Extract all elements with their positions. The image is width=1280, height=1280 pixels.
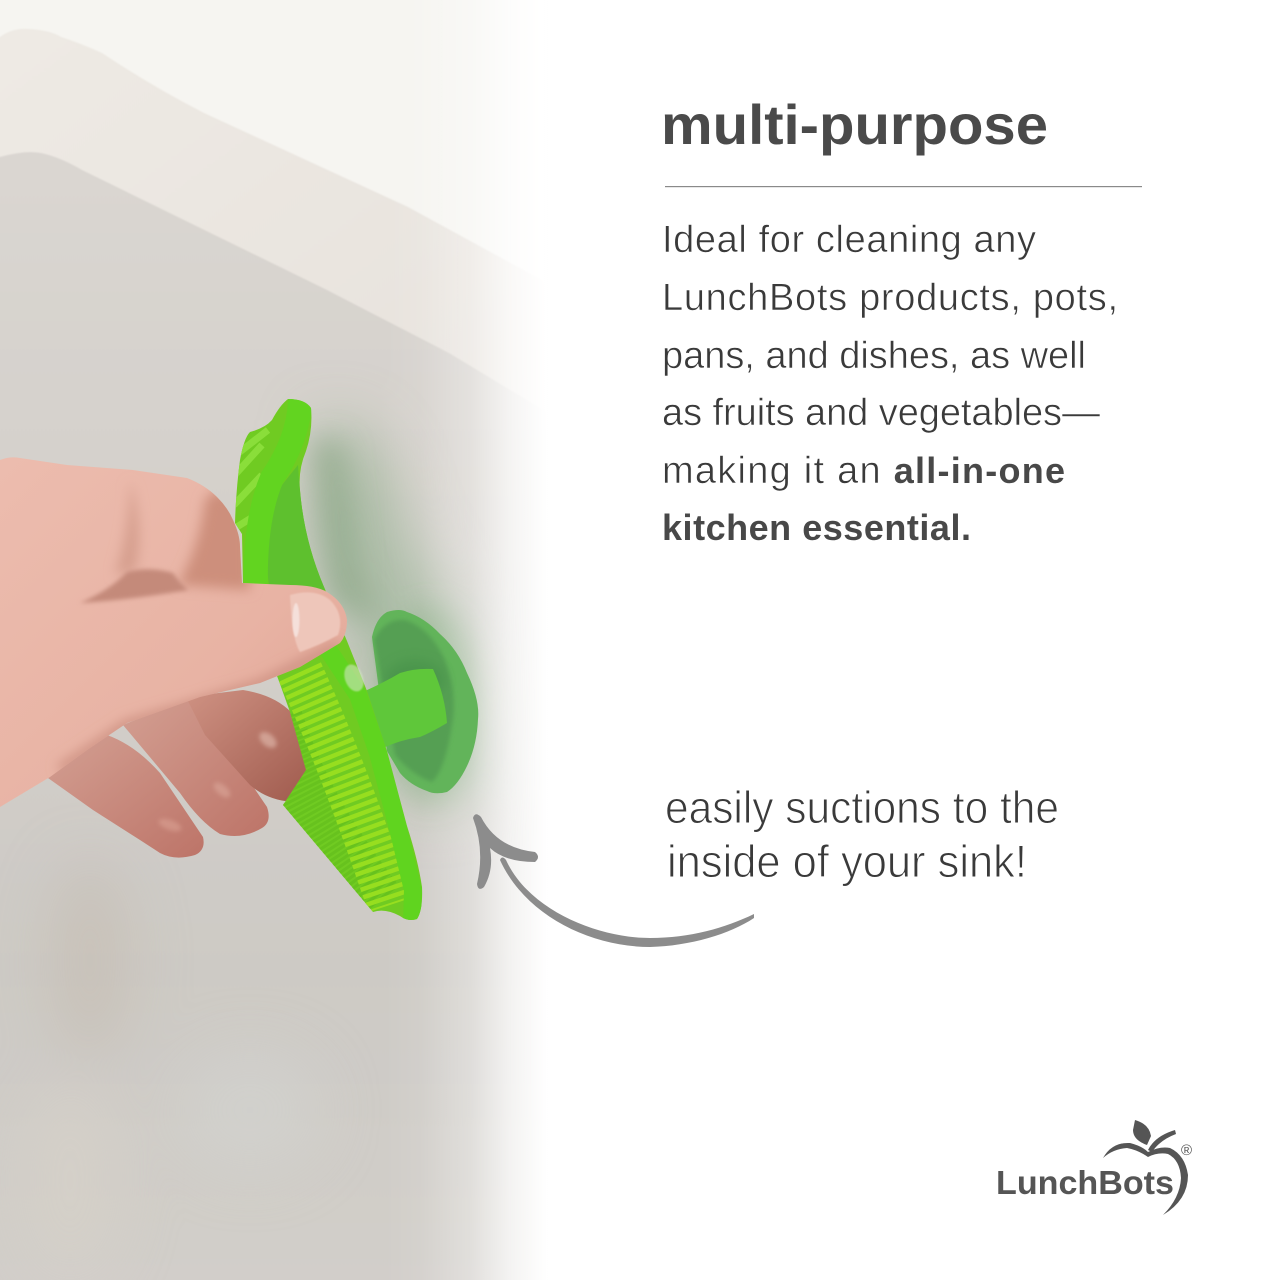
logo: LunchBots — [996, 1120, 1192, 1215]
body text: LunchBots products, pots, — [662, 277, 1118, 319]
body text: pans, and dishes, as well — [662, 335, 1086, 377]
wall behind the sink — [0, 0, 560, 420]
photo: hand fingers behind brush — [48, 690, 312, 858]
divider rule — [665, 186, 1142, 187]
sink stains — [20, 860, 320, 1280]
sink rim — [0, 29, 560, 460]
arrow: curved pointer to suction cup — [473, 814, 754, 947]
body text — [662, 219, 1118, 548]
registered mark: ® — [1181, 1142, 1192, 1159]
photo: hand and thumb — [0, 457, 347, 807]
thumb fold — [80, 569, 188, 603]
body text: kitchen essential. — [662, 507, 971, 548]
handwritten callout — [665, 782, 1059, 887]
logo wordmark: LunchBots — [996, 1164, 1174, 1201]
green reflection on basin — [310, 420, 490, 810]
bristle comb — [300, 672, 390, 905]
scrubber raised edge — [256, 402, 300, 592]
cup dark ring — [385, 660, 445, 700]
thumb underside shade — [60, 645, 340, 770]
body text: as fruits and vegetables— — [662, 392, 1100, 434]
logo apple — [1103, 1143, 1188, 1215]
handwritten callout: inside of your sink! — [667, 836, 1027, 887]
palm and thumb — [0, 457, 347, 807]
index finger — [186, 690, 312, 801]
index knuckle shade — [178, 490, 250, 590]
cup inner shade — [374, 620, 454, 782]
thumbnail — [290, 592, 340, 652]
body text: Ideal for cleaning any — [662, 219, 1036, 261]
stem — [365, 669, 447, 748]
finger highlights — [157, 729, 280, 834]
middle finger — [123, 698, 269, 836]
photo: suction cup and stem — [365, 610, 478, 793]
inner bristles — [272, 720, 375, 905]
ring finger — [48, 735, 204, 858]
edge strip — [325, 645, 413, 925]
water droplets — [341, 662, 367, 694]
photo: green silicone scrubber — [232, 399, 422, 925]
body text: making it an all-in-one — [662, 450, 1065, 492]
upper bristle ribs — [232, 430, 268, 530]
handwritten callout: easily suctions to the — [665, 782, 1059, 833]
white fade to right panel — [380, 0, 548, 1280]
suction cup — [372, 610, 478, 793]
thumb joint crease shade — [115, 480, 139, 575]
sink basin interior — [0, 152, 560, 1280]
heading: multi-purpose: multi-purpose — [661, 93, 1048, 156]
scrubber back face — [268, 466, 326, 590]
